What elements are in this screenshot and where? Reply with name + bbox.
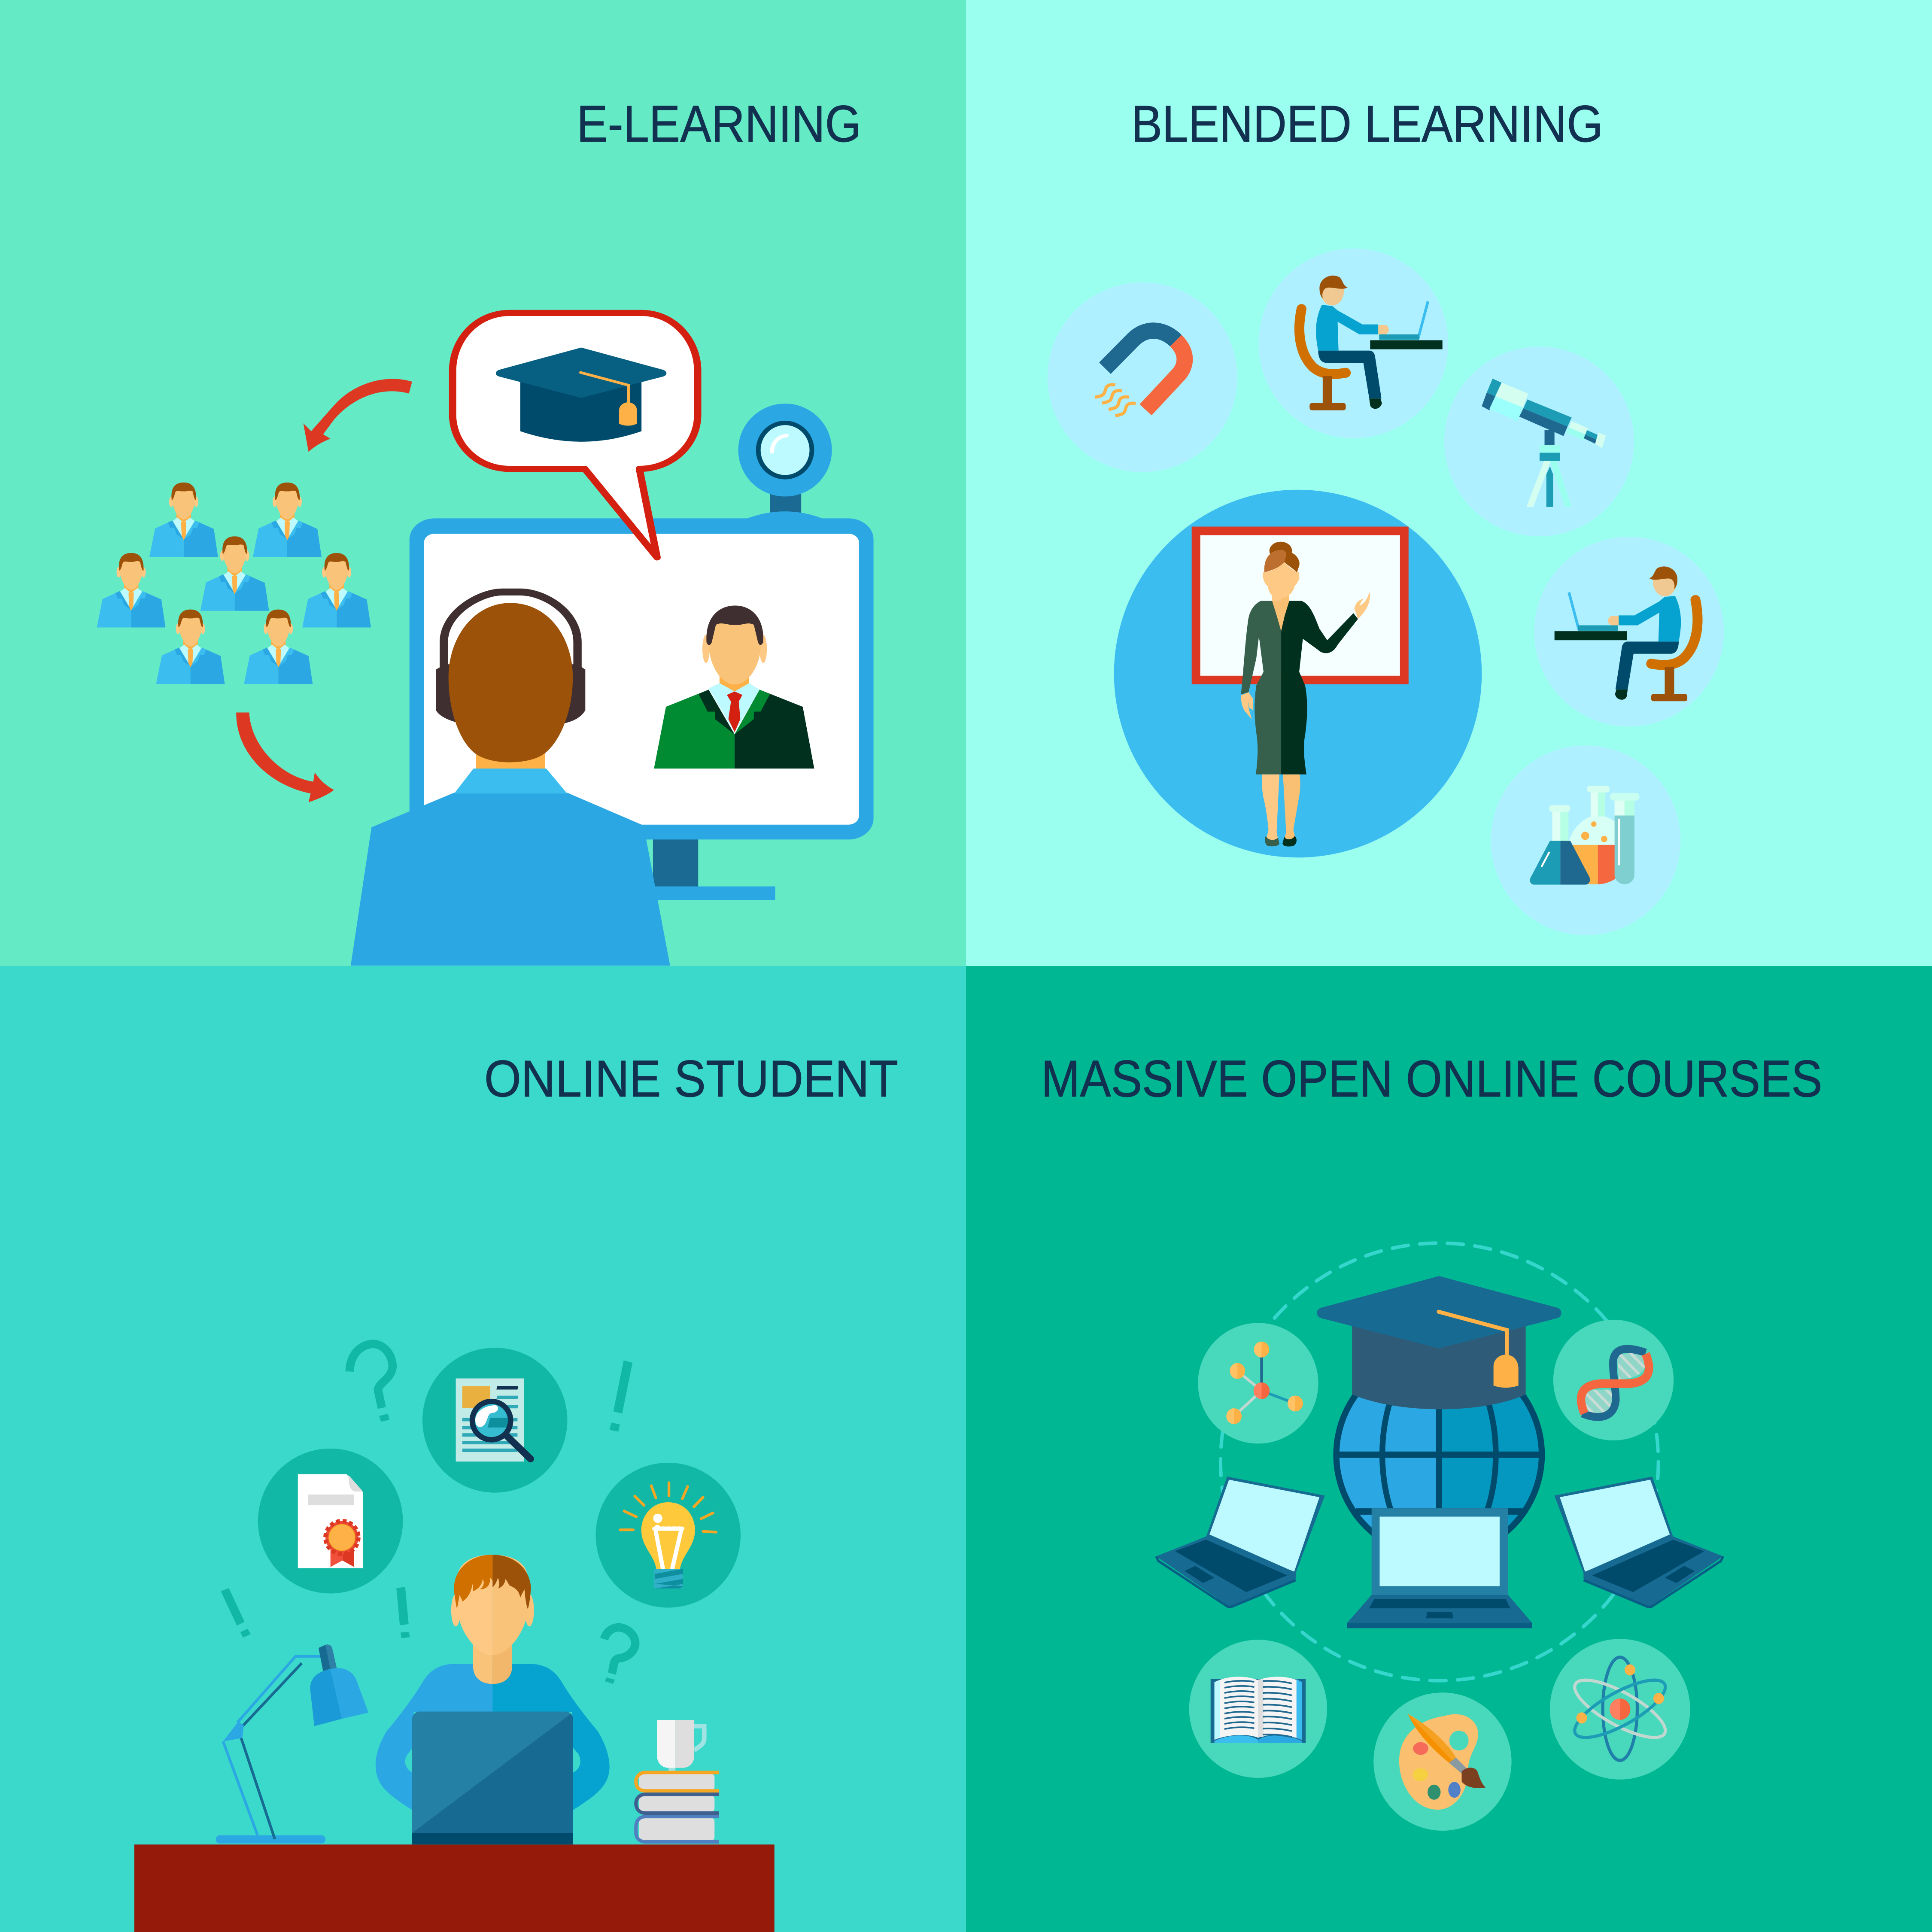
coffee mug xyxy=(657,1720,704,1772)
icon: globe xyxy=(1337,1349,1542,1560)
question and exclamation marks xyxy=(221,1344,635,1684)
dashed orbit xyxy=(1221,1243,1659,1680)
online student illustration xyxy=(216,1344,741,1844)
e-learning illustration xyxy=(97,313,874,966)
icon: student at laptop xyxy=(1258,249,1448,438)
icon: molecule xyxy=(1198,1323,1318,1443)
icon: right laptop xyxy=(1555,1476,1723,1607)
monitor screen xyxy=(410,518,874,839)
icon: center laptop xyxy=(1347,1508,1532,1628)
title: online student: ONLINE STUDENT xyxy=(484,1050,898,1108)
learner from behind with headset xyxy=(351,592,670,966)
panel: massive open online courses xyxy=(966,966,1932,1932)
title: massive open online courses: MASSIVE OPEN ONLINE COURSES xyxy=(1041,1050,1823,1108)
desk xyxy=(134,1844,775,1932)
icon: light bulb xyxy=(595,1463,741,1607)
icon: paint palette xyxy=(1373,1692,1512,1831)
panel: online student xyxy=(0,966,966,1932)
teacher figure xyxy=(1241,542,1370,847)
arrow: from bubble to students xyxy=(304,379,412,452)
desk lamp xyxy=(216,1644,368,1844)
icon: telescope xyxy=(1444,346,1634,536)
presentation board xyxy=(1196,531,1404,680)
icon: student at laptop, mirrored xyxy=(1534,537,1724,726)
icon: dna xyxy=(1553,1320,1674,1440)
icon: open book xyxy=(1189,1640,1327,1778)
title: e-learning: E-LEARNING xyxy=(577,95,861,153)
icon: graduation cap xyxy=(1317,1276,1561,1409)
icon: document with magnifier xyxy=(422,1348,567,1493)
monitor stand xyxy=(653,838,775,900)
icon: laboratory flasks xyxy=(1491,745,1680,935)
icon: left laptop xyxy=(1156,1476,1325,1607)
arrow: from students to screen xyxy=(236,712,334,802)
teacher circle with board xyxy=(1114,490,1482,857)
panel: blended learning xyxy=(966,0,1932,966)
speech bubble with graduation cap xyxy=(453,313,698,557)
blended learning illustration xyxy=(1048,249,1724,935)
video presenter xyxy=(654,606,814,769)
stack of books xyxy=(636,1772,719,1842)
icon: magnet xyxy=(1048,283,1237,472)
panel: e-learning xyxy=(0,0,966,966)
icon: certificate xyxy=(258,1449,403,1593)
student group xyxy=(97,483,371,684)
mooc illustration xyxy=(1156,1243,1723,1831)
student with laptop xyxy=(376,1555,610,1844)
icon: atom xyxy=(1550,1639,1690,1780)
icon: webcam xyxy=(738,404,832,519)
laptop xyxy=(412,1711,573,1844)
title: blended learning: BLENDED LEARNING xyxy=(1131,95,1603,153)
